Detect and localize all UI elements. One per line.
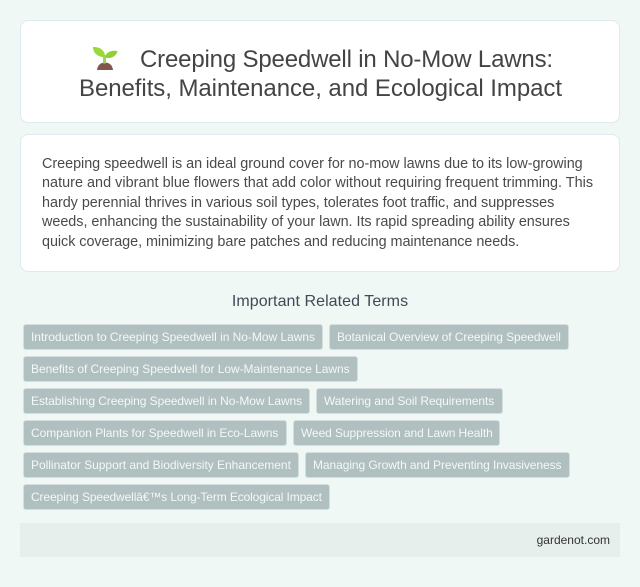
tag: Creeping Speedwellâ€™s Long-Term Ecological Impact — [31, 490, 322, 504]
tag — [23, 388, 310, 414]
description text: Creeping speedwell is an ideal ground cover for no-mow lawns due to its low-growing — [42, 156, 583, 172]
tag — [23, 356, 358, 382]
tag: Botanical Overview of Creeping Speedwell — [337, 330, 561, 344]
panel: title card — [20, 20, 620, 123]
footer bar — [20, 523, 620, 557]
tag: Watering and Soil Requirements — [324, 394, 494, 408]
tag — [23, 420, 287, 446]
description text: weeds, enhancing the sustainability of your lawn. Its rapid spreading ability ensures — [42, 214, 570, 230]
tag — [23, 324, 323, 350]
description text: quick coverage, minimizing bare patches and reducing maintenance needs. — [42, 234, 519, 250]
tag — [316, 388, 503, 414]
description text — [42, 156, 593, 250]
tag: Establishing Creeping Speedwell in No-Mow Lawns — [31, 394, 302, 408]
heading: important related terms: Important Related Terms — [232, 293, 408, 310]
icon: seedling — [93, 47, 118, 70]
tag — [329, 324, 569, 350]
tag: Pollinator Support and Biodiversity Enhancement — [31, 458, 291, 472]
tag: Managing Growth and Preventing Invasiveness — [313, 458, 561, 472]
tag: Companion Plants for Speedwell in Eco-Lawns — [31, 426, 278, 440]
footer source: gardenot.com — [537, 533, 610, 547]
tag — [23, 452, 299, 478]
title line 1: Creeping Speedwell in No-Mow Lawns: — [140, 46, 553, 73]
description text: hardy perennial thrives in various soil types, tolerates foot traffic, and suppresses — [42, 195, 554, 211]
tag: Benefits of Creeping Speedwell for Low-Maintenance Lawns — [31, 362, 350, 376]
tag — [23, 484, 330, 510]
title line 2: Benefits, Maintenance, and Ecological Impact — [79, 75, 562, 102]
panel: description card — [20, 134, 620, 272]
tag: Weed Suppression and Lawn Health — [301, 426, 493, 440]
tag: Introduction to Creeping Speedwell in No-Mow Lawns — [31, 330, 315, 344]
description text: nature and vibrant blue flowers that add color without requiring frequent trimming. This — [42, 175, 593, 191]
tag — [305, 452, 570, 478]
tag — [293, 420, 500, 446]
